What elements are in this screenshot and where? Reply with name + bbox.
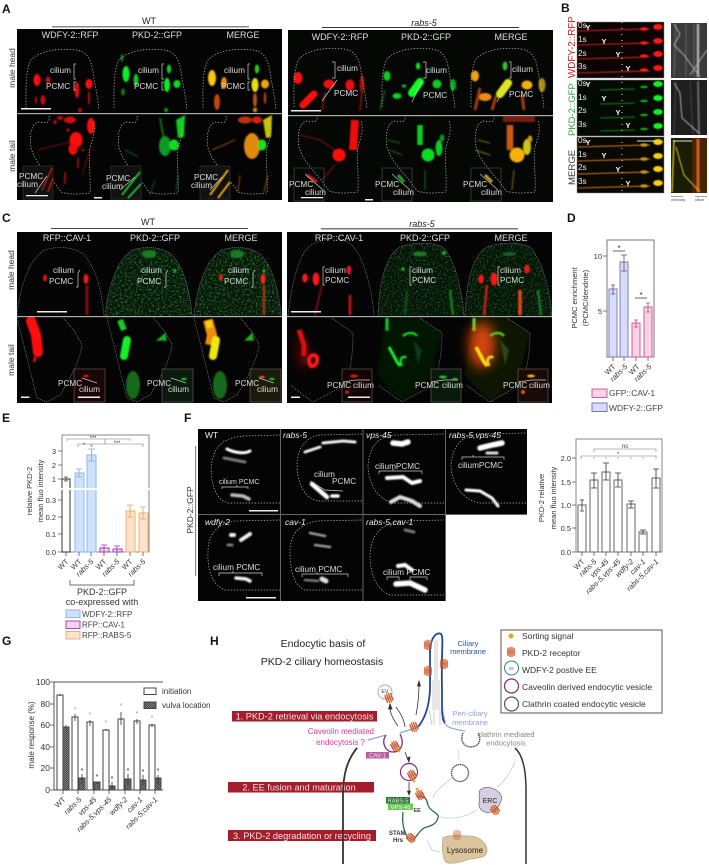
- cell outline left: [343, 748, 357, 864]
- panel C rabs-5 micrographs: cilium: [500, 266, 521, 275]
- step banner 3: 3. PKD-2 degradation or recycling: [233, 831, 371, 841]
- rabs-5 header C: rabs-5: [409, 219, 436, 229]
- panel A WT micrographs: cilium: [50, 66, 71, 75]
- legend text: [522, 631, 652, 709]
- panel F bar chart: cav-1: [628, 557, 647, 576]
- CAV-1 label: [366, 752, 389, 760]
- panel C rabs-5 micrographs: cilium: [353, 381, 374, 390]
- early endosome: [403, 788, 438, 844]
- panel F bar chart: ns: [622, 444, 628, 450]
- panel A WT micrographs: MERGE: [226, 30, 260, 40]
- cell outline right: [515, 748, 526, 864]
- panel E bar chart: rabs-5: [100, 556, 122, 578]
- panel D bar chart: WT: [603, 362, 618, 377]
- panel F rotated label: [185, 446, 196, 576]
- panel B time-lapse strips: Y: [625, 64, 631, 73]
- panel label C: C: [2, 211, 11, 225]
- panel E bar chart: ***: [89, 436, 97, 442]
- legend text: Clathrin coated endocytic vesicle: [522, 699, 646, 709]
- panel label B: B: [561, 1, 570, 15]
- clathrin coated vesicle: [452, 764, 468, 782]
- panel F bar chart: 2.0: [561, 454, 571, 463]
- panel C WT micrographs: RFP::CAV-1: [43, 233, 91, 243]
- panel B time-lapse strips: Y: [585, 23, 591, 32]
- panel G bar chart: *: [89, 712, 92, 719]
- panel E bar chart: WT: [94, 557, 109, 572]
- panel A rabs-5 micrographs: cilium: [426, 66, 447, 75]
- clathrin mediated label: [477, 730, 535, 748]
- panel A rabs-5 micrographs: PCMC: [509, 90, 533, 99]
- panel F micrographs: ciliumPCMC: [375, 462, 420, 471]
- caveolin vesicle forming: [384, 734, 402, 752]
- side labels C: male head: [6, 250, 16, 290]
- panel G legend: initiation: [162, 687, 191, 696]
- panel C rabs-5 micrographs: cilium: [325, 266, 346, 275]
- panel A WT micrographs: cilium: [138, 66, 159, 75]
- panel B time-lapse strips: 2s: [578, 163, 587, 172]
- panel A WT micrographs: cilium: [17, 180, 38, 189]
- ciliary membrane label: Ciliary: [458, 639, 479, 648]
- panel label F: F: [184, 411, 191, 425]
- panel F micrographs: [198, 429, 527, 601]
- panel B time-lapse strips: 0s: [578, 21, 587, 30]
- peri-ciliary membrane: [368, 718, 465, 740]
- panel E bar chart: 1: [52, 475, 56, 484]
- panel B time-lapse strips: 0s: [578, 79, 587, 88]
- panel D legend: WDFY-2::GFP: [609, 403, 663, 413]
- panel G bar chart: rabs-5;cav-1: [124, 795, 159, 831]
- panel E caption: PKD-2::GFP: [77, 587, 127, 597]
- panel F micrographs: vps-45: [366, 430, 392, 440]
- panel E caption: co-expressed with: [66, 597, 138, 607]
- panel G bar chart: *: [142, 769, 145, 776]
- panel B channel labels: WDFY-2::RFP: [567, 16, 578, 78]
- panel F bar chart: rabs-5,cav-1: [625, 557, 660, 593]
- panel A WT micrographs: cilium: [191, 181, 212, 190]
- legend text: Sorting signal: [522, 631, 574, 641]
- kymograph axis labels: [671, 196, 707, 202]
- panel A WT micrographs: PCMC: [19, 172, 43, 181]
- panel A WT micrographs: cilium: [224, 66, 245, 75]
- panel E bar chart: 0.0: [46, 548, 56, 557]
- panel E legend: [66, 610, 132, 640]
- panel F micrographs: PCMC: [332, 477, 356, 486]
- panel D legend: GFP::CAV-1: [609, 388, 655, 398]
- panel A WT micrographs: PCMC: [194, 173, 218, 182]
- panel B time-lapse strips: Y: [585, 80, 591, 89]
- panel C WT micrographs: cilium: [257, 385, 278, 394]
- rabs-5 header A: rabs-5: [411, 18, 438, 28]
- ERC compartment: [479, 788, 501, 816]
- panel E caption: [66, 587, 138, 607]
- ciliary membrane label: [450, 639, 486, 656]
- panel E legend: RFP::RABS-5: [82, 631, 132, 640]
- panel F bar chart: PKD-2 relative: [537, 474, 546, 522]
- icon: clathrin vesicle: [504, 697, 518, 711]
- VPS-45 tag: [388, 804, 413, 811]
- panel B time-lapse strips: Y: [615, 165, 621, 174]
- panel F bar chart: 0.5: [561, 524, 571, 533]
- panel C rabs-5 micrographs: MERGE: [494, 233, 528, 243]
- panel E bar chart: 0.1: [46, 530, 56, 539]
- panel E bar chart: mean fluo intensity: [36, 459, 45, 522]
- panel C rabs-5 micrographs: PCMC: [500, 276, 524, 285]
- panel E bar chart: ***: [113, 441, 121, 447]
- panel F bar chart: mean fluo intensity: [549, 466, 558, 529]
- panel label E: E: [2, 411, 10, 425]
- caveolin mediated endocytosis label: endocytosis ?: [316, 738, 366, 747]
- icon: WDFY-2 EE: [504, 661, 518, 675]
- panel C WT micrographs: cilium: [53, 266, 74, 275]
- panel C WT micrographs: MERGE: [224, 233, 258, 243]
- CAV-1 label: CAV-1: [369, 754, 387, 760]
- clathrin mediated label: endocytosis: [486, 738, 526, 748]
- caveolin derived vesicle: [400, 764, 418, 782]
- panel C WT micrographs: PKD-2::GFP: [130, 233, 180, 243]
- panel C WT micrographs: PCMC: [235, 379, 259, 388]
- panel C rabs-5 micrographs: PCMC: [412, 276, 436, 285]
- gray recycling arrows: [427, 749, 515, 852]
- panel A rabs-5 micrographs: cilium: [337, 64, 358, 73]
- panel C WT micrographs: PCMC: [49, 277, 73, 286]
- panel B time-lapse strips: Y: [601, 94, 607, 103]
- panel A rabs-5 micrographs: PKD-2::GFP: [401, 32, 451, 42]
- ERC compartment: ERC: [483, 798, 497, 805]
- panel A WT micrographs: PCMC: [46, 82, 70, 91]
- panel D bar chart: *: [639, 291, 643, 300]
- panel G bar chart: WT: [53, 795, 68, 810]
- panel A rabs-5 micrographs: PCMC: [423, 91, 447, 100]
- panel F bar chart: WT: [572, 557, 587, 572]
- panel E bar chart: 2: [52, 461, 56, 470]
- panel C rabs-5 micrographs: cilium: [412, 266, 433, 275]
- panel G bar chart: *: [105, 720, 108, 727]
- panel C WT micrographs: cilium: [141, 266, 162, 275]
- VPS-45 tag: VPS-45: [391, 805, 410, 811]
- clathrin coated pit: [462, 733, 480, 747]
- panel B time-lapse strips: 2s: [578, 49, 587, 58]
- STAM Hrs labels: [389, 831, 406, 844]
- panel D bar chart: (PCMC/dendrite): [581, 269, 590, 326]
- panel A WT micrographs: PCMC: [106, 174, 130, 183]
- panel B channel labels: PKD-2::GFP: [567, 83, 578, 136]
- side labels C: [6, 250, 16, 376]
- panel C rabs-5 micrographs: cilium: [529, 381, 550, 390]
- caveolin mediated endocytosis label: [308, 727, 374, 747]
- panel G bar chart: male response (%): [27, 701, 36, 769]
- panel E bar chart: relative PKD-2: [25, 467, 34, 515]
- panel D bar chart: rabs-5: [608, 361, 630, 383]
- panel G bar chart: 0: [45, 785, 50, 795]
- panel C rabs-5 micrographs: PCMC: [503, 381, 527, 390]
- panel G bar chart: *: [81, 768, 84, 775]
- panel G bar chart: *: [127, 768, 130, 775]
- panel A rabs-5 micrographs: PCMC: [375, 180, 399, 189]
- panel B time-lapse strips: Y: [601, 37, 607, 46]
- panel A rabs-5 micrographs: cilium: [305, 188, 326, 197]
- panel C WT micrographs: cilium: [228, 266, 249, 275]
- panel E bar chart: WT: [69, 557, 84, 572]
- lysosome: [442, 830, 487, 863]
- panel G bar chart: 80: [41, 699, 50, 709]
- panel E legend: RFP::CAV-1: [82, 620, 126, 630]
- panel B time-lapse strips: 2s: [578, 106, 587, 115]
- panel F micrographs: wdfy-2: [205, 517, 230, 527]
- panel D bar chart: 10: [594, 252, 602, 261]
- panel G bar chart: 100: [36, 677, 50, 687]
- panel G bar chart: *: [157, 768, 160, 775]
- panel B time-lapse strips: 0s: [578, 136, 587, 145]
- panel label D: D: [567, 211, 576, 225]
- panel F micrographs: cilium PCMC: [295, 565, 342, 574]
- icon: WDFY-2 EE: EE: [509, 667, 514, 671]
- panel C WT micrographs: cilium: [168, 385, 189, 394]
- STAM Hrs labels: STAM: [389, 831, 406, 837]
- panel A rabs-5 micrographs: PCMC: [289, 180, 313, 189]
- panel E bar chart: [25, 435, 153, 585]
- panel G bar chart: *: [111, 776, 114, 783]
- panel G bar chart: 20: [41, 763, 50, 773]
- panel C WT micrographs: cilium: [79, 385, 100, 394]
- panel B channel labels: MERGE: [567, 150, 578, 185]
- panel A WT micrographs: [17, 29, 282, 200]
- panel F bar chart: 0.0: [561, 548, 571, 557]
- panel D bar chart: [570, 240, 654, 383]
- panel G legend: [144, 687, 210, 710]
- panel C rabs-5 micrographs: cilium: [442, 381, 463, 390]
- side label male head: male head: [7, 48, 17, 88]
- panel D bar chart: WT: [627, 362, 642, 377]
- panel G legend: vulva location: [162, 701, 210, 710]
- panel C WT micrographs: PCMC: [137, 277, 161, 286]
- side labels C: male tail: [6, 344, 16, 376]
- panel G bar chart: rabs-5;vps-45: [75, 794, 114, 834]
- legend text: PKD-2 receptor: [522, 648, 581, 658]
- lysosome: Lysosome: [447, 846, 484, 855]
- panel E bar chart: WT: [56, 557, 71, 572]
- icon: sorting signal: [508, 634, 514, 638]
- panel E bar chart: WT: [120, 557, 135, 572]
- panel B time-lapse strips: [577, 21, 664, 193]
- panel E bar chart: *: [83, 443, 86, 449]
- panel G bar chart: 40: [41, 742, 50, 752]
- panel G bar chart: *: [120, 703, 123, 710]
- panel G bar chart: [27, 677, 163, 834]
- panel F micrographs: rabs-5,vps-45: [449, 430, 501, 440]
- panel C rabs-5 micrographs: PKD-2::GFP: [400, 233, 450, 243]
- panel C WT micrographs: [17, 232, 285, 403]
- panel C rabs-5 micrographs: PCMC: [327, 381, 351, 390]
- peri-ciliary membrane label: Peri-ciliary: [452, 709, 488, 718]
- panel B time-lapse strips: 3s: [578, 177, 587, 186]
- WT header C: WT: [141, 217, 155, 227]
- peri-ciliary membrane label: [452, 709, 488, 727]
- PKD-2 receptors on cilium: [409, 640, 448, 733]
- panel C rabs-5 micrographs: [287, 232, 554, 403]
- panel A WT micrographs: PKD-2::GFP: [132, 30, 182, 40]
- panel G bar chart: *: [136, 711, 139, 718]
- panel B time-lapse strips: Y: [615, 50, 621, 59]
- panel A WT micrographs: PCMC: [221, 82, 245, 91]
- panel A rabs-5 micrographs: cilium: [393, 188, 414, 197]
- panel B time-lapse strips: Y: [585, 138, 591, 147]
- legend text: WDFY-2 postive EE: [522, 665, 597, 675]
- EV vesicle: [378, 685, 394, 704]
- panel G bar chart: *: [74, 707, 77, 714]
- panel label A: A: [2, 2, 11, 16]
- panel F bar chart: *: [617, 452, 620, 458]
- panel C WT micrographs: PCMC: [147, 379, 171, 388]
- panel A WT micrographs: cilium: [102, 182, 123, 191]
- panel F micrographs: cilium PCMC: [219, 479, 259, 486]
- panel F micrographs: cilium PCMC: [383, 568, 430, 577]
- panel F bar chart: rabs-5,vps-45: [584, 556, 623, 596]
- panel G bar chart: 60: [41, 720, 50, 730]
- panel H title: Endocytic basis of: [281, 638, 365, 650]
- panel F bar chart: wdfy-2: [613, 556, 636, 579]
- panel E bar chart: rabs-5: [126, 556, 148, 578]
- panel D bar chart: 5: [598, 307, 602, 316]
- panel A rabs-5 micrographs: PCMC: [463, 180, 487, 189]
- panel C WT micrographs: PCMC: [224, 277, 248, 286]
- panel G bar chart: cav-1: [125, 795, 144, 814]
- panel C rabs-5 micrographs: RFP::CAV-1: [315, 233, 363, 243]
- panel F bar chart: rabs-5: [577, 556, 599, 578]
- panel C rabs-5 micrographs: PCMC: [325, 276, 349, 285]
- legend text: Caveolin derived endocytic vesicle: [522, 682, 652, 692]
- panel H title: [261, 638, 383, 668]
- ciliary membrane and axoneme: [418, 633, 446, 727]
- panel A rabs-5 micrographs: cilium: [512, 65, 533, 74]
- panel E bar chart: 0.3: [46, 496, 56, 505]
- panel G bar chart: *: [151, 715, 154, 722]
- panel E bar chart: 3: [52, 447, 56, 456]
- panel B time-lapse strips: Y: [615, 108, 621, 117]
- EV vesicle: EV: [381, 689, 389, 695]
- panel G bar chart: wdfy-2: [107, 794, 130, 817]
- legend H: [501, 630, 662, 713]
- panel F rotated label: PKD-2::GFP: [185, 486, 195, 534]
- step banner 1: 1. PKD-2 retrieval via endocytosis: [236, 712, 374, 722]
- icon: caveolin vesicle: [504, 679, 518, 693]
- panel E bar chart: 0.2: [46, 513, 56, 522]
- panel B time-lapse strips: 1s: [578, 150, 587, 159]
- panel B time-lapse strips: Y: [625, 121, 631, 130]
- panel F micrographs: rabs-5: [283, 430, 307, 440]
- panel F micrographs: rabs-5,cav-1: [366, 517, 414, 527]
- panel F micrographs: cav-1: [285, 517, 306, 527]
- step banner 2: 2. EE fusion and maturation: [242, 782, 356, 792]
- panel F bar chart: 1.5: [561, 478, 571, 487]
- clathrin mediated label: clathrin mediated: [477, 730, 535, 739]
- ciliary membrane label: membrane: [450, 647, 486, 656]
- panel D bar chart: rabs-5: [632, 361, 654, 383]
- panel F bar chart: vps-45: [588, 556, 611, 579]
- panel label H: H: [210, 634, 219, 648]
- panel D bar chart: *: [617, 244, 621, 253]
- RABS-5 tag: RABS-5: [388, 798, 408, 804]
- kymograph axis labels: cell body: [671, 198, 685, 202]
- WT header A: WT: [142, 16, 156, 26]
- panel F micrographs: cilium PCMC: [213, 563, 260, 572]
- panel B channel labels: [567, 16, 578, 185]
- kymograph axis labels: cilium: [695, 198, 704, 202]
- panel E bar chart: rabs-5: [74, 556, 96, 578]
- panel A WT micrographs: WDFY-2::RFP: [42, 30, 98, 40]
- panel D bar chart: PCMC enrichment: [570, 266, 579, 329]
- panel A rabs-5 micrographs: [288, 30, 553, 202]
- EE label: EE: [414, 808, 421, 814]
- panel B time-lapse strips: 3s: [578, 62, 587, 71]
- panel D legend: [592, 388, 663, 413]
- panel C WT micrographs: PCMC: [58, 379, 82, 388]
- panel G bar chart: *: [96, 774, 99, 781]
- panel G bar chart: vps-45: [76, 794, 99, 817]
- trafficking arrows: [388, 681, 420, 795]
- icon: PKD-2 receptor: [507, 648, 515, 656]
- panel H title: PKD-2 ciliary homeostasis: [261, 656, 383, 668]
- panel F micrographs: ciliumPCMC: [458, 461, 503, 470]
- caveolin mediated endocytosis label: Caveolin mediated: [308, 727, 374, 736]
- panel B time-lapse strips: Y: [601, 151, 607, 160]
- panel A WT micrographs: PCMC: [134, 82, 158, 91]
- side label male tail: male tail: [7, 140, 17, 172]
- panel B time-lapse strips: 1s: [578, 93, 587, 102]
- panel A rabs-5 micrographs: PCMC: [334, 89, 358, 98]
- panel A rabs-5 micrographs: MERGE: [494, 32, 528, 42]
- panel B time-lapse strips: 3s: [578, 120, 587, 129]
- panel F micrographs: cilium: [314, 470, 335, 479]
- panel B time-lapse strips: 1s: [578, 35, 587, 44]
- panel C rabs-5 micrographs: PCMC: [415, 381, 439, 390]
- RABS-5 tag: [386, 797, 410, 804]
- peri-ciliary membrane label: membrane: [452, 718, 488, 727]
- panel G bar chart: rabs-5: [62, 794, 84, 816]
- panel E legend: WDFY-2::RFP: [82, 610, 132, 619]
- panel F bar chart: [537, 439, 662, 596]
- panel A rabs-5 micrographs: cilium: [481, 188, 502, 197]
- panel F micrographs: WT: [205, 430, 218, 440]
- panel label G: G: [2, 634, 11, 648]
- STAM Hrs labels: Hrs: [393, 838, 404, 844]
- panel B time-lapse strips: Y: [625, 179, 631, 188]
- panel A rabs-5 micrographs: WDFY-2::RFP: [312, 32, 368, 42]
- panel F bar chart: 1.0: [561, 501, 571, 510]
- panel B kymographs: [671, 23, 707, 193]
